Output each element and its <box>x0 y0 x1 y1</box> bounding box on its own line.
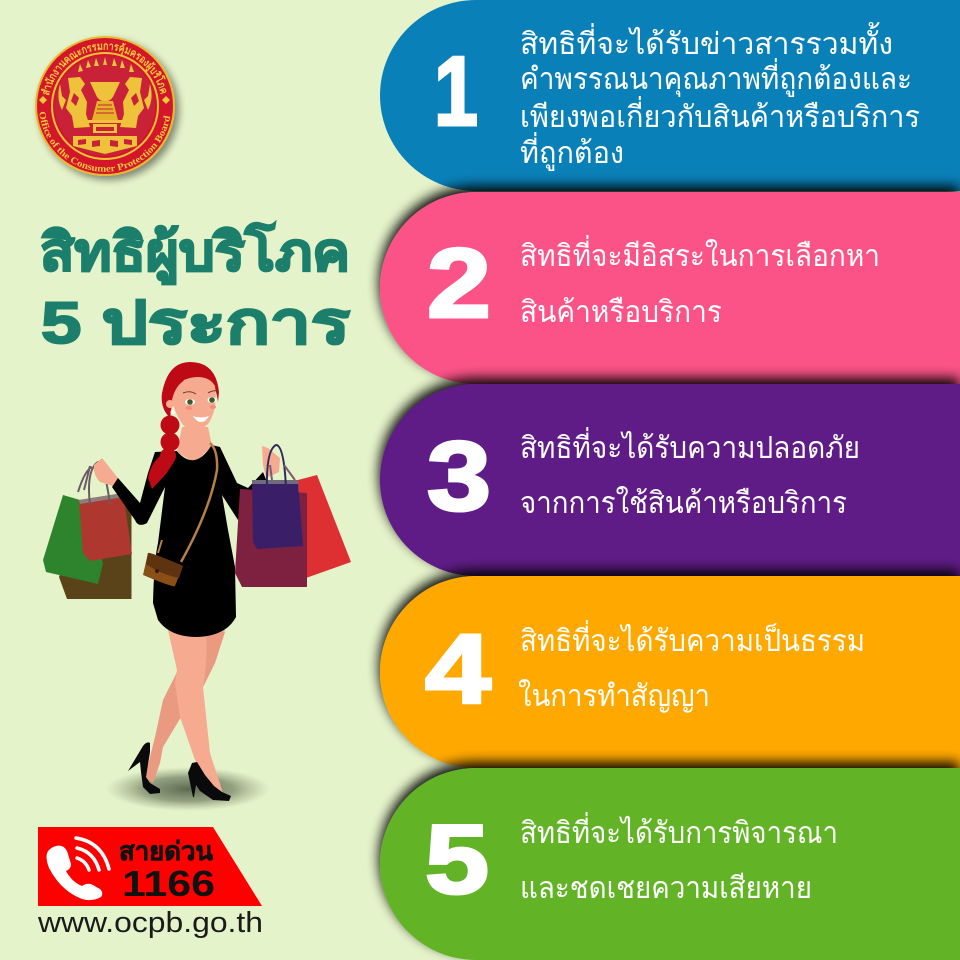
logo text: English arc: Office of the Consumer Protection Board <box>40 112 170 172</box>
panel 1: right to information: 1 <box>434 36 478 146</box>
panel 1: right to information <box>380 0 960 191</box>
panel 2: right to freedom of choice: สิทธิที่จะมีอิสระในการเลือกหา <box>520 235 880 273</box>
panel 4: right to fair contracts: 4 <box>425 614 491 724</box>
legs <box>128 630 231 801</box>
panel 4: right to fair contracts <box>380 576 960 768</box>
hotline badge <box>38 827 262 906</box>
panel 3: right to safety: สิทธิที่จะได้รับความปลอดภัย <box>520 427 860 465</box>
panel 2: right to freedom of choice: สินค้าหรือบริการ <box>520 296 722 329</box>
panel 1: right to information: คำพรรณนาคุณภาพที่ถูกต้องและ <box>520 58 912 98</box>
panel 4: right to fair contracts: ในการทำสัญญา <box>518 679 710 713</box>
website: www.ocpb.go.th <box>37 907 263 939</box>
title <box>40 221 350 356</box>
face <box>166 377 217 430</box>
hotline number: 1166 <box>122 863 215 904</box>
neck and hands <box>94 427 280 487</box>
panel 5: right to compensation: 5 <box>425 804 489 914</box>
icon: phone <box>46 846 102 900</box>
icon: signal waves <box>76 838 109 870</box>
shoes <box>128 742 160 794</box>
crossbody bag <box>143 443 217 586</box>
hotline label: สายด่วน <box>119 836 213 866</box>
panel 2: right to freedom of choice <box>380 192 960 384</box>
panel 4: right to fair contracts: สิทธิที่จะได้รับความเป็นธรรม <box>520 620 865 658</box>
panel 3: right to safety <box>380 384 960 576</box>
ground shadow <box>106 767 270 811</box>
panel 3: right to safety: 3 <box>427 421 491 531</box>
logo emblem <box>58 57 152 154</box>
left shopping bags <box>43 462 132 599</box>
dress <box>112 445 267 637</box>
panel 3: right to safety: จากการใช้สินค้าหรือบริการ <box>520 486 847 520</box>
right shopping bags <box>235 445 351 587</box>
panel 1: right to information: เพียงพอเกี่ยวกับสินค้าหรือบริการ <box>520 96 920 134</box>
hair and braid <box>148 362 219 489</box>
panel 5: right to compensation <box>380 768 960 960</box>
panel 5: right to compensation: และชดเชยความเสียหาย <box>520 872 812 905</box>
panel 2: right to freedom of choice: 2 <box>427 228 491 338</box>
logo text: Thai arc: สำนักงานคณะกรรมการคุ้มครองผู้บริโภค <box>41 42 166 96</box>
title: สิทธิผู้บริโภค <box>40 221 350 285</box>
title: 5 ประการ <box>41 291 350 356</box>
panel 5: right to compensation: สิทธิที่จะได้รับการพิจารณา <box>520 812 838 850</box>
panel 1: right to information: ที่ถูกต้อง <box>520 132 624 171</box>
logo diamonds <box>39 96 170 104</box>
illustration: woman with shopping bags <box>43 362 351 811</box>
panel 1: right to information: สิทธิที่จะได้รับข่าวสารรวมทั้ง <box>520 22 893 61</box>
logo: Office of the Consumer Protection Board seal <box>34 34 184 186</box>
